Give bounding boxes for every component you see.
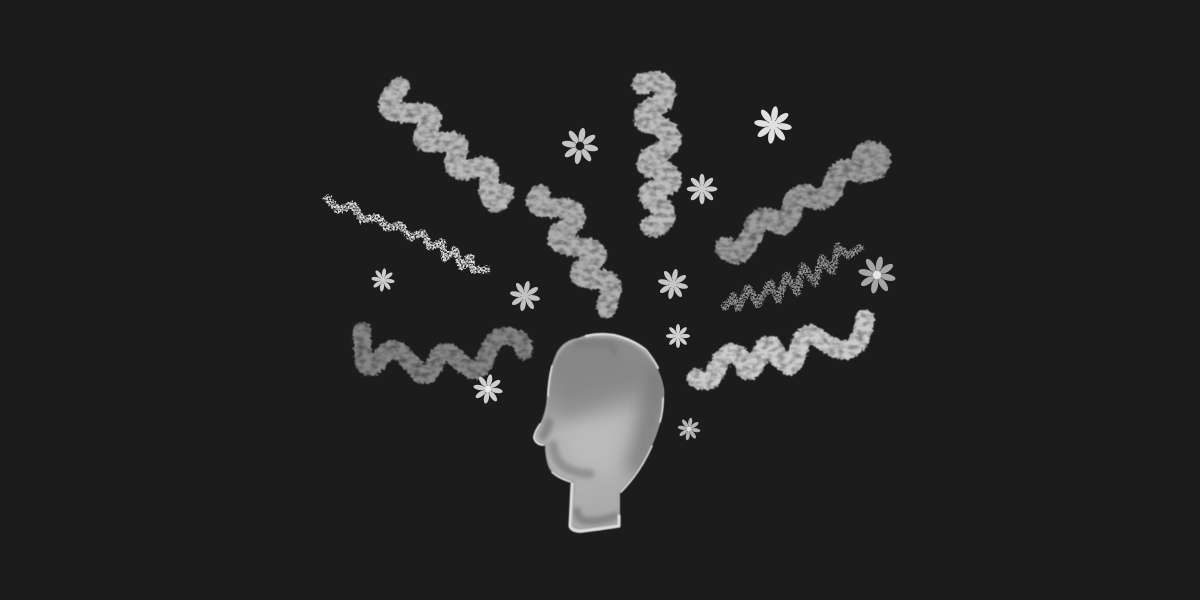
flower: right of head xyxy=(676,416,702,442)
flower: top right, bright xyxy=(752,104,794,146)
flower: far right, grey with white centre xyxy=(855,253,899,297)
squiggle: top centre vertical furry xyxy=(642,82,671,226)
flower: next to vertical squiggle xyxy=(687,174,717,204)
squiggle: centre furry xyxy=(536,194,611,309)
flower: left small xyxy=(370,267,396,293)
squiggle: right sparkly dark xyxy=(725,247,860,308)
flower: below left squiggle xyxy=(471,372,505,406)
head: outer rim xyxy=(533,333,664,533)
squiggle: left sparkly thin xyxy=(327,198,487,270)
squiggle: top right dark furry xyxy=(726,152,880,253)
head: bright rim highlights xyxy=(534,334,663,531)
squiggle: top left furry xyxy=(388,87,504,203)
illustration: head with radiating squiggles and flowers xyxy=(322,70,896,534)
squiggle: bottom right furry xyxy=(696,319,865,381)
squiggle: bottom left dark furry xyxy=(362,331,524,375)
flower: left of head xyxy=(507,278,543,314)
flower: above head right xyxy=(666,324,690,348)
head xyxy=(533,333,672,533)
flower: centre right xyxy=(655,266,691,302)
head: inner shading xyxy=(535,338,672,528)
flower: near centre top, dark centre xyxy=(559,125,601,167)
